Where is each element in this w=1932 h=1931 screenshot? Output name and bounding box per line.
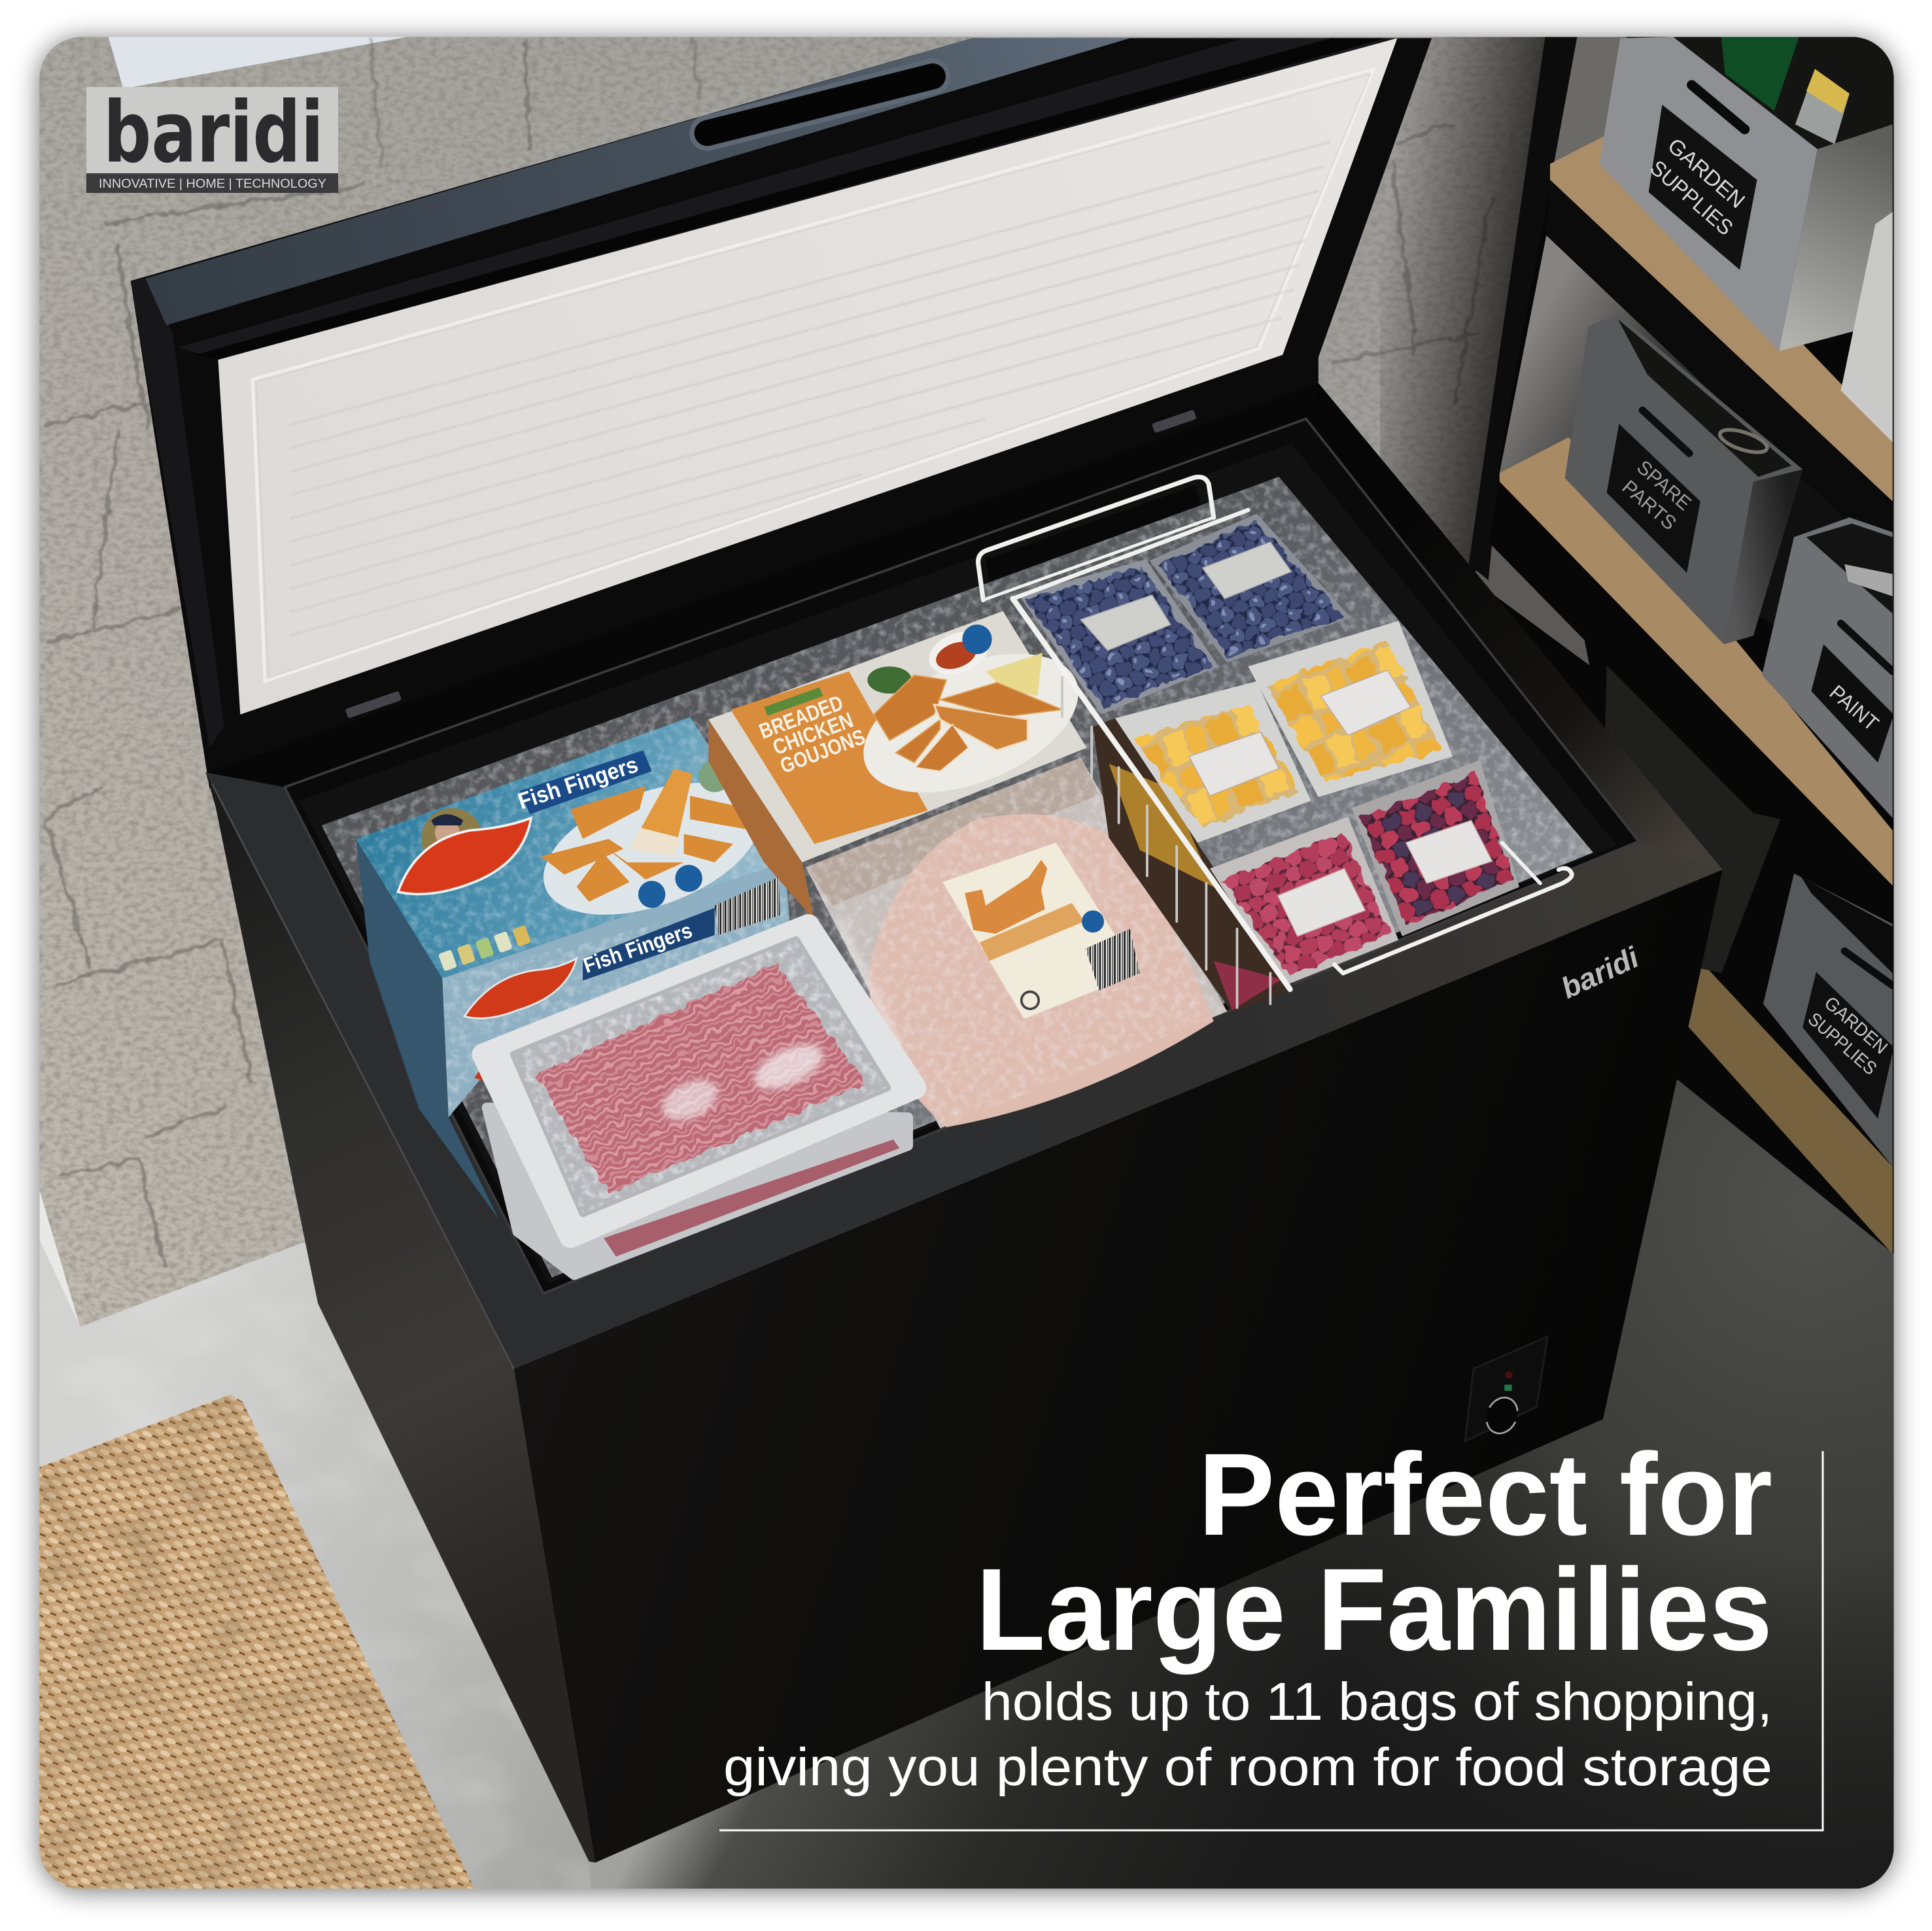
bag sheen [838,918,899,1047]
food: breaded chicken goujons box [708,611,1098,920]
mango bag two [1248,621,1453,797]
logo wordmark: baridi [103,84,324,182]
control panel [1465,1337,1547,1441]
lid handle [707,77,933,133]
bin: garden supplies bottom: GARDEN [1821,992,1892,1058]
shelving unit [1380,37,1894,1269]
captain emblem [421,808,483,872]
box title: BREADED [756,690,846,743]
corner frame lines [719,1451,1823,1830]
bin: spare parts [1565,314,1803,644]
bin: paint [1762,517,1894,818]
food: minced meat tray upper [483,925,916,1237]
background: brick wall [39,37,1894,1392]
bin: dark unlabelled [1602,665,1780,973]
bin: spare parts: PARTS [1617,476,1680,534]
long side wire [1013,599,1290,989]
box title: CHICKEN [769,708,856,759]
sauce bowl [923,624,994,682]
lid inner liner [218,38,1397,715]
headline: Large Families [976,1544,1772,1675]
opening [285,419,1639,1293]
second box banner [583,908,715,981]
front panel [514,870,1723,1863]
food: minced meat tray lower [487,1108,908,1275]
bin: garden supplies top: GARDEN [1663,133,1750,213]
bin: garden supplies top: SUPPLIES [1646,156,1738,240]
logo tagline: INNOVATIVE | HOME | TECHNOLOGY [99,177,326,191]
blueberry bag two [1150,514,1351,663]
food: berry bags [1210,760,1519,985]
left side panel [206,772,595,1863]
box title: GOUJONS [777,725,869,778]
bin: white box edge [1841,212,1893,442]
red logo swoosh [398,818,531,894]
plate with fish fingers [526,757,778,941]
food: blueberry bags [1019,514,1351,715]
wire basket [978,477,1572,1008]
back handle [986,485,1201,581]
bin: paint: PAINT [1825,680,1884,736]
lower shelf board [1685,961,1893,1254]
lid top surface [145,38,1130,325]
background: floor [39,1079,1894,1888]
basket uprights [1062,677,1270,1008]
headline: Perfect for [1198,1429,1772,1560]
subheading: holds up to 11 bags of shopping, [982,1672,1772,1732]
title text: Fish Fingers [515,751,641,814]
headline [976,1429,1772,1675]
goujons on plate [844,626,1098,821]
mixed berry bag [1352,760,1519,936]
top rim [206,383,1723,1369]
brand mark on front: baridi [1556,940,1645,1005]
front handle [1334,868,1572,973]
food: fish fingers box [356,717,790,1220]
lid seal [179,38,1397,360]
nutrition labels [438,925,531,972]
blueberry bag one [1019,559,1218,715]
brand tag [764,687,823,716]
freezer lid [131,38,1432,789]
box title [756,690,869,778]
raspberry bag [1210,817,1398,985]
lid hinge right [1152,409,1197,433]
bin: garden supplies bottom: SUPPLIES [1804,1008,1881,1079]
mango bag one [1115,681,1311,843]
food: under-basket items [1093,718,1294,1013]
lid hinge left [345,691,402,719]
poultry label [942,843,1140,1019]
shelf post [1469,37,1577,580]
blue banner [520,750,652,814]
bin: garden supplies top [1599,37,1894,351]
food: mango bags [1115,621,1453,843]
frosted interior [322,477,1593,1278]
rug [39,1395,474,1888]
orange panel [731,672,928,844]
subheading [723,1672,1772,1797]
middle shelf board [1500,437,1893,886]
subheading: giving you plenty of room for food storage [723,1737,1772,1797]
top shelf board [1550,137,1893,502]
food: fish fingers box: Fish Fingers [580,918,695,978]
freezer body [206,383,1723,1863]
logo [86,84,338,193]
bin: garden supplies bottom [1763,874,1894,1167]
barcode [715,877,780,935]
food: frozen chicken bag [806,758,1227,1129]
bin: spare parts: SPARE [1632,456,1695,515]
